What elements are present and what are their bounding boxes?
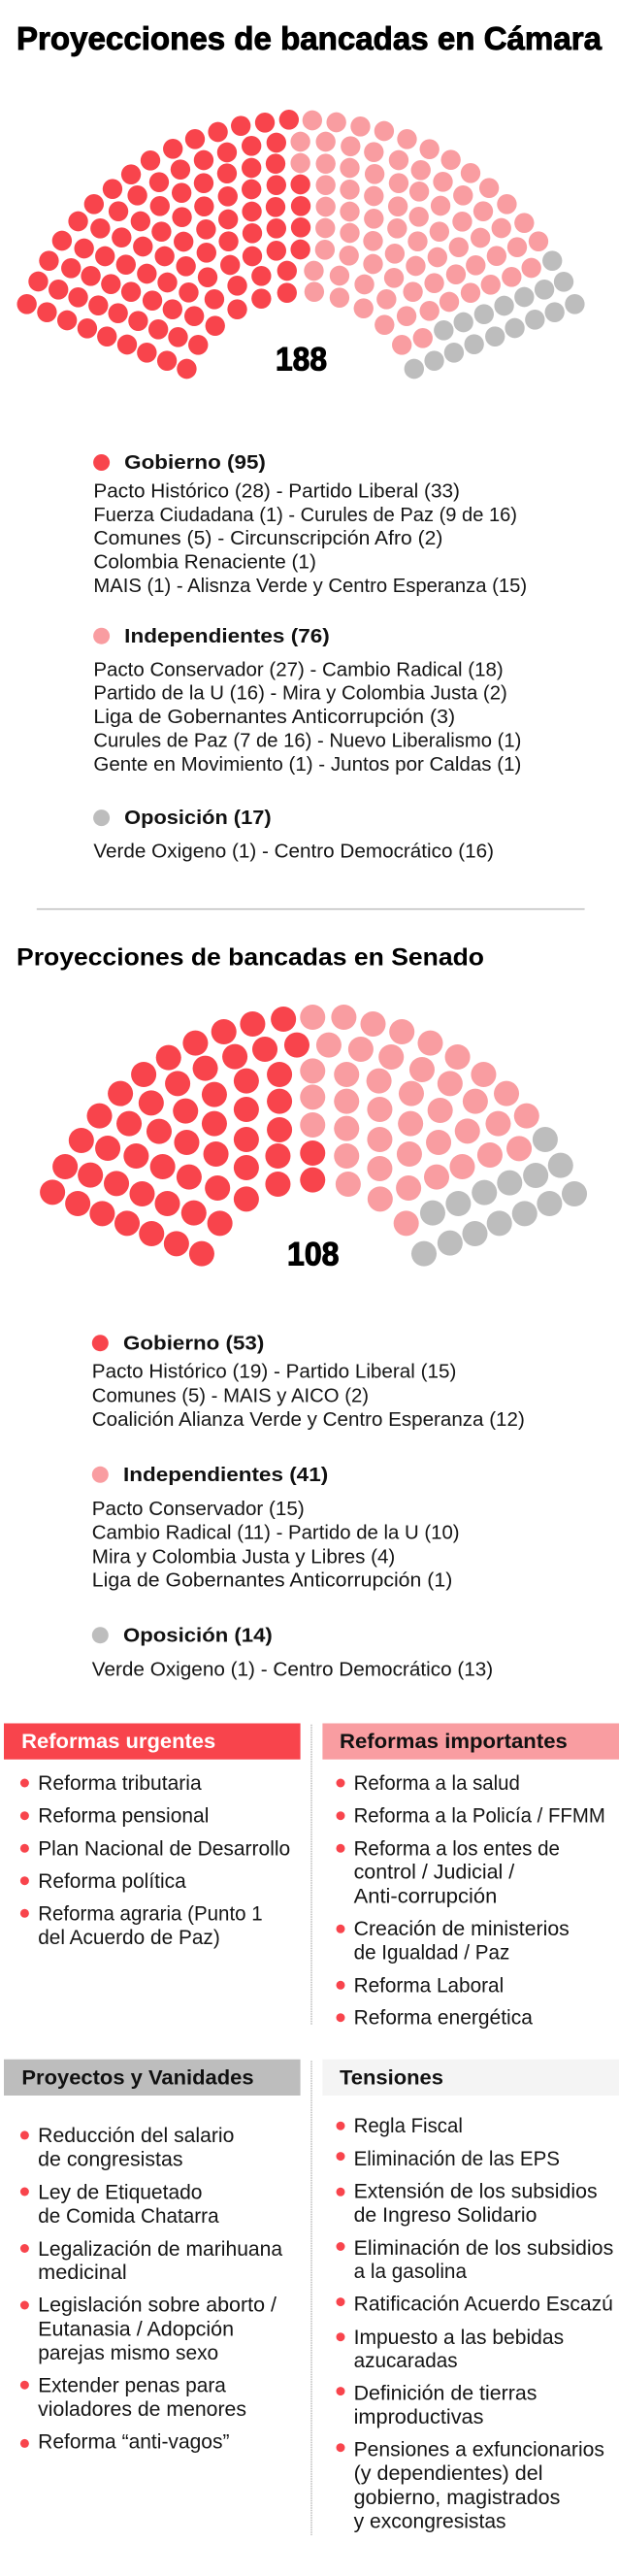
title: Senado: Proyecciones de bancadas en Senado xyxy=(16,943,484,971)
bullet list: Reducción del salario xyxy=(38,2125,234,2147)
bullet list: Legislación sobre aborto / xyxy=(38,2295,277,2317)
legend group: Independientes: Partido de la U (16) - Mira y Colombia Justa (2) xyxy=(93,682,507,705)
bullet list: de Igualdad / Paz xyxy=(354,1942,509,1965)
legend group: Independientes: Curules de Paz (7 de 16) - Nuevo Liberalismo (1) xyxy=(93,730,521,752)
bullet list: Reforma a la Policía / FFMM xyxy=(354,1805,605,1828)
bullet list: Plan Nacional de Desarrollo xyxy=(38,1837,290,1860)
seats: Independientes 41 xyxy=(300,1005,539,1236)
bullet list: Reforma a la salud xyxy=(354,1772,520,1795)
legend group: Independientes: Independientes (41) xyxy=(123,1464,328,1486)
legend group: Gobierno: Colombia Renaciente (1) xyxy=(93,551,316,574)
seats: Oposición 14 xyxy=(411,1127,587,1267)
bullet list xyxy=(336,2115,613,2533)
bullet list: de Comida Chatarra xyxy=(38,2205,219,2228)
seats: Gobierno 53 xyxy=(40,1007,325,1267)
bullet list: Reforma agraria (Punto 1 xyxy=(38,1903,263,1926)
bullet list: Ratificación Acuerdo Escazú xyxy=(354,2294,613,2316)
bullet list: Reforma Laboral xyxy=(354,1974,504,1997)
hemicycle chart: Senado seats xyxy=(40,1005,587,1267)
seats: Gobierno 95 xyxy=(16,110,310,379)
panel header xyxy=(4,1724,301,1760)
panel: Proyectos y Vanidades xyxy=(4,2060,301,2453)
legend group: Independientes: Mira y Colombia Justa y Libres (4) xyxy=(92,1545,395,1568)
bullet list: Reforma energética xyxy=(354,2007,533,2030)
bullet list: Impuesto a las bebidas xyxy=(354,2327,564,2349)
panel header xyxy=(4,2060,301,2096)
bullet list: Reforma política xyxy=(38,1870,186,1893)
bullet list: Reforma “anti-vagos” xyxy=(38,2430,230,2453)
bullet list: (y dependientes) del xyxy=(354,2462,543,2485)
legend group: Independientes: Pacto Conservador (27) - Cambio Radical (18) xyxy=(93,658,504,680)
panel header xyxy=(322,2060,619,2096)
legend group: Gobierno: Gobierno (53) xyxy=(123,1332,264,1354)
panel header xyxy=(322,1724,619,1760)
bullet list: gobierno, magistrados xyxy=(354,2487,560,2509)
bullet list: Reforma tributaria xyxy=(38,1772,202,1795)
legend group: Oposición: Oposición (14) xyxy=(123,1625,273,1647)
panel: Tensiones xyxy=(322,2060,619,2533)
legend: Senado xyxy=(92,1332,525,1680)
legend group: Oposición: Verde Oxigeno (1) - Centro Democrático (13) xyxy=(92,1658,493,1680)
legend: Cámara xyxy=(93,451,527,863)
panel header: Reformas importantes xyxy=(340,1731,568,1753)
legend group: Gobierno: Coalición Alianza Verde y Centro Esperanza (12) xyxy=(92,1408,525,1431)
bullet list: parejas mismo sexo xyxy=(38,2342,218,2364)
legend group: Gobierno: Pacto Histórico (28) - Partido Liberal (33) xyxy=(93,479,460,502)
legend group: Gobierno xyxy=(92,1332,525,1431)
bullet list xyxy=(336,1772,605,2030)
legend group: Gobierno: Gobierno (95) xyxy=(124,451,266,474)
bullet list: de congresistas xyxy=(38,2149,183,2171)
bullet list: Anti-corrupción xyxy=(354,1885,497,1907)
bullet list: a la gasolina xyxy=(354,2261,467,2283)
bullet list: del Acuerdo de Paz) xyxy=(38,1927,220,1949)
bullet list: y excongresistas xyxy=(354,2511,506,2533)
bullet list: Regla Fiscal xyxy=(354,2115,463,2137)
legend group: Independientes xyxy=(93,625,521,776)
bullet list: medicinal xyxy=(38,2262,127,2284)
bullet list: Extensión de los subsidios xyxy=(354,2180,598,2202)
bullet list: Reforma a los entes de xyxy=(354,1837,560,1860)
legend group: Independientes: Liga de Gobernantes Anticorrupción (3) xyxy=(93,706,455,728)
legend group: Independientes: Cambio Radical (11) - Partido de la U (10) xyxy=(92,1522,460,1544)
bullet list: Legalización de marihuana xyxy=(38,2238,282,2261)
hemicycle chart: Cámara seats xyxy=(16,110,585,379)
legend group: Gobierno: Pacto Histórico (19) - Partido Liberal (15) xyxy=(92,1361,456,1383)
bullet list xyxy=(20,1772,290,1949)
total seats: 188: 188 xyxy=(276,342,327,379)
legend group: Gobierno: Comunes (5) - MAIS y AICO (2) xyxy=(92,1384,369,1406)
legend group: Independientes: Independientes (76) xyxy=(124,625,330,647)
legend group: Oposición: Verde Oxigeno (1) - Centro Democrático (16) xyxy=(93,841,494,863)
seats: Oposición 17 xyxy=(405,250,585,379)
legend group: Gobierno: MAIS (1) - Alisnza Verde y Centro Esperanza (15) xyxy=(93,575,527,597)
bullet list: azucaradas xyxy=(354,2350,458,2372)
legend group: Gobierno: Fuerza Ciudadana (1) - Curules de Paz (9 de 16) xyxy=(93,504,517,526)
legend group: Oposición xyxy=(92,1625,493,1680)
legend group: Oposición xyxy=(93,807,494,863)
bullet list: Eutanasia / Adopción xyxy=(38,2318,234,2340)
bullet list: Ley de Etiquetado xyxy=(38,2181,203,2203)
panel: Reformas urgentes xyxy=(4,1724,301,1949)
panel header: Proyectos y Vanidades xyxy=(21,2067,254,2090)
bullet list: Creación de ministerios xyxy=(354,1918,570,1940)
legend group: Independientes xyxy=(92,1464,460,1592)
legend group: Independientes: Pacto Conservador (15) xyxy=(92,1498,305,1520)
seats: Independientes 76 xyxy=(290,111,548,355)
legend group: Gobierno xyxy=(93,451,527,597)
bullet list: improductivas xyxy=(354,2406,483,2428)
panel: Reformas importantes xyxy=(322,1724,619,2030)
bullet list: Definición de tierras xyxy=(354,2383,537,2405)
legend group: Independientes: Liga de Gobernantes Anticorrupción (1) xyxy=(92,1569,452,1592)
bullet list xyxy=(20,2125,282,2453)
legend group: Independientes: Gente en Movimiento (1) - Juntos por Caldas (1) xyxy=(93,753,521,776)
title: Cámara: Proyecciones de bancadas en Cámara xyxy=(16,20,603,56)
panel header: Reformas urgentes xyxy=(21,1731,215,1753)
bullet list: violadores de menores xyxy=(38,2398,246,2421)
bullet list: Pensiones a exfuncionarios xyxy=(354,2439,604,2461)
legend group: Oposición: Oposición (17) xyxy=(124,807,272,829)
bullet list: Eliminación de las EPS xyxy=(354,2148,560,2170)
bullet list: control / Judicial / xyxy=(354,1862,514,1884)
bullet list: Extender penas para xyxy=(38,2375,226,2397)
legend group: Gobierno: Comunes (5) - Circunscripción Afro (2) xyxy=(93,527,442,549)
bullet list: Eliminación de los subsidios xyxy=(354,2237,613,2260)
bullet list: de Ingreso Solidario xyxy=(354,2204,537,2227)
bullet list: Reforma pensional xyxy=(38,1805,209,1828)
total seats: 108: 108 xyxy=(287,1236,340,1272)
panel header: Tensiones xyxy=(340,2067,443,2090)
